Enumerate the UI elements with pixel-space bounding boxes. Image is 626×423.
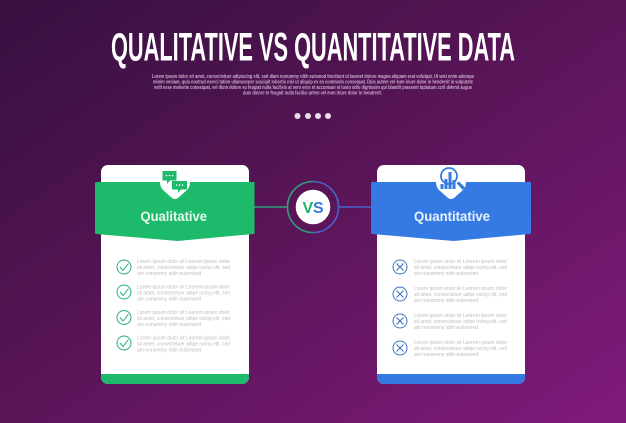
banner: quantitative xyxy=(371,182,531,241)
banner: qualitative xyxy=(95,182,254,241)
list item 1: sit amet, consectetuer adipe iscing elit, sed xyxy=(414,265,507,271)
card: quantitative xyxy=(377,165,525,384)
list item 2 xyxy=(117,284,230,302)
list item 2: Lorem ipsum dolor sit Leorem ipsum dolor xyxy=(414,286,507,292)
VS badge xyxy=(288,182,338,232)
list item 1 xyxy=(117,259,230,277)
list item 4: sit amet, consectetuer adipe iscing elit, sed xyxy=(137,342,230,348)
intro paragraph: minim veniam, quis nostrud exerci tation ullamcorper suscipit lobortis nisl ut aliquip ex ea commodo consequat. Duis autem vel eum iriure dolor in hendrerit in vulputate xyxy=(153,80,473,86)
list item 3: am nonummy nibh euismoed xyxy=(414,325,478,331)
banner label: Quantitative xyxy=(414,208,490,224)
list item 4: Lorem ipsum dolor sit Leorem ipsum dolor xyxy=(137,336,230,342)
panel: quantitative xyxy=(371,165,531,384)
VS badge: S xyxy=(313,200,324,217)
list item 1: am nonummy nibh euismoed xyxy=(137,271,201,277)
list item 3: Lorem ipsum dolor sit Leorem ipsum dolor xyxy=(137,310,230,316)
intro paragraph: duis dolore te feugait nulla facilisi artem vel eum iriure dolor in hendrerit. xyxy=(243,90,382,96)
list item 2: sit amet, consectetuer adipe iscing elit, sed xyxy=(414,292,507,298)
list item 1 xyxy=(393,259,507,277)
connector: blue xyxy=(338,206,372,208)
list item 4 xyxy=(117,336,230,354)
list item 3: sit amet, consectetuer adipe iscing elit, sed xyxy=(414,319,507,325)
panel: qualitative xyxy=(95,165,254,384)
list item 4 xyxy=(393,340,507,358)
card footer band xyxy=(377,374,525,384)
pagination dots xyxy=(294,113,331,119)
intro paragraph xyxy=(152,74,474,96)
list item 2: am nonummy nibh euismoed xyxy=(414,298,478,304)
banner label: Qualitative xyxy=(140,208,207,224)
icon: chat bubbles xyxy=(162,171,187,193)
list item 3 xyxy=(117,310,230,328)
list item 4: sit amet, consectetuer adipe iscing elit, sed xyxy=(414,346,507,352)
list item 3: Lorem ipsum dolor sit Leorem ipsum dolor xyxy=(414,313,507,319)
card: qualitative xyxy=(101,165,249,384)
list item 3 xyxy=(393,313,507,331)
list item 2: sit amet, consectetuer adipe iscing elit, sed xyxy=(137,290,230,296)
list item 2: am nonummy nibh euismoed xyxy=(137,296,201,302)
list item 1: Lorem ipsum dolor sit Leorem ipsum dolor xyxy=(414,259,507,265)
VS badge: V xyxy=(302,200,314,217)
list item 4: am nonummy nibh euismoed xyxy=(137,348,201,354)
list item 1: am nonummy nibh euismoed xyxy=(414,271,478,277)
card footer band xyxy=(101,374,249,384)
intro paragraph: velit esse molestie consequat, vel illum dolore eu feugiat nulla facilisis at vero eros et accumsan et iusto odio dignissim qui blandit praesent luptatum zzril delenit augue xyxy=(154,85,472,91)
intro paragraph: Lorem ipsum dolor sit amet, consectetuer adipiscing elit, sed diam nonummy nibh euismod tincidunt ut laoreet dolore magna aliquam erat volutpat. Ut wisi enim adorape xyxy=(152,74,474,80)
list item 1: Lorem ipsum dolor sit Leorem ipsum dolor xyxy=(137,259,230,265)
list item 2 xyxy=(393,286,507,304)
list item 3: am nonummy nibh euismoed xyxy=(137,322,201,328)
connector: green xyxy=(254,206,288,208)
list item 4: Lorem ipsum dolor sit Leorem ipsum dolor xyxy=(414,340,507,346)
list item 3: sit amet, consectetuer adipe iscing elit, sed xyxy=(137,316,230,322)
list item 4: am nonummy nibh euismoed xyxy=(414,352,478,358)
icon: magnifier chart xyxy=(440,168,465,190)
list item 2: Lorem ipsum dolor sit Leorem ipsum dolor xyxy=(137,284,230,290)
list item 1: sit amet, consectetuer adipe iscing elit, sed xyxy=(137,265,230,271)
